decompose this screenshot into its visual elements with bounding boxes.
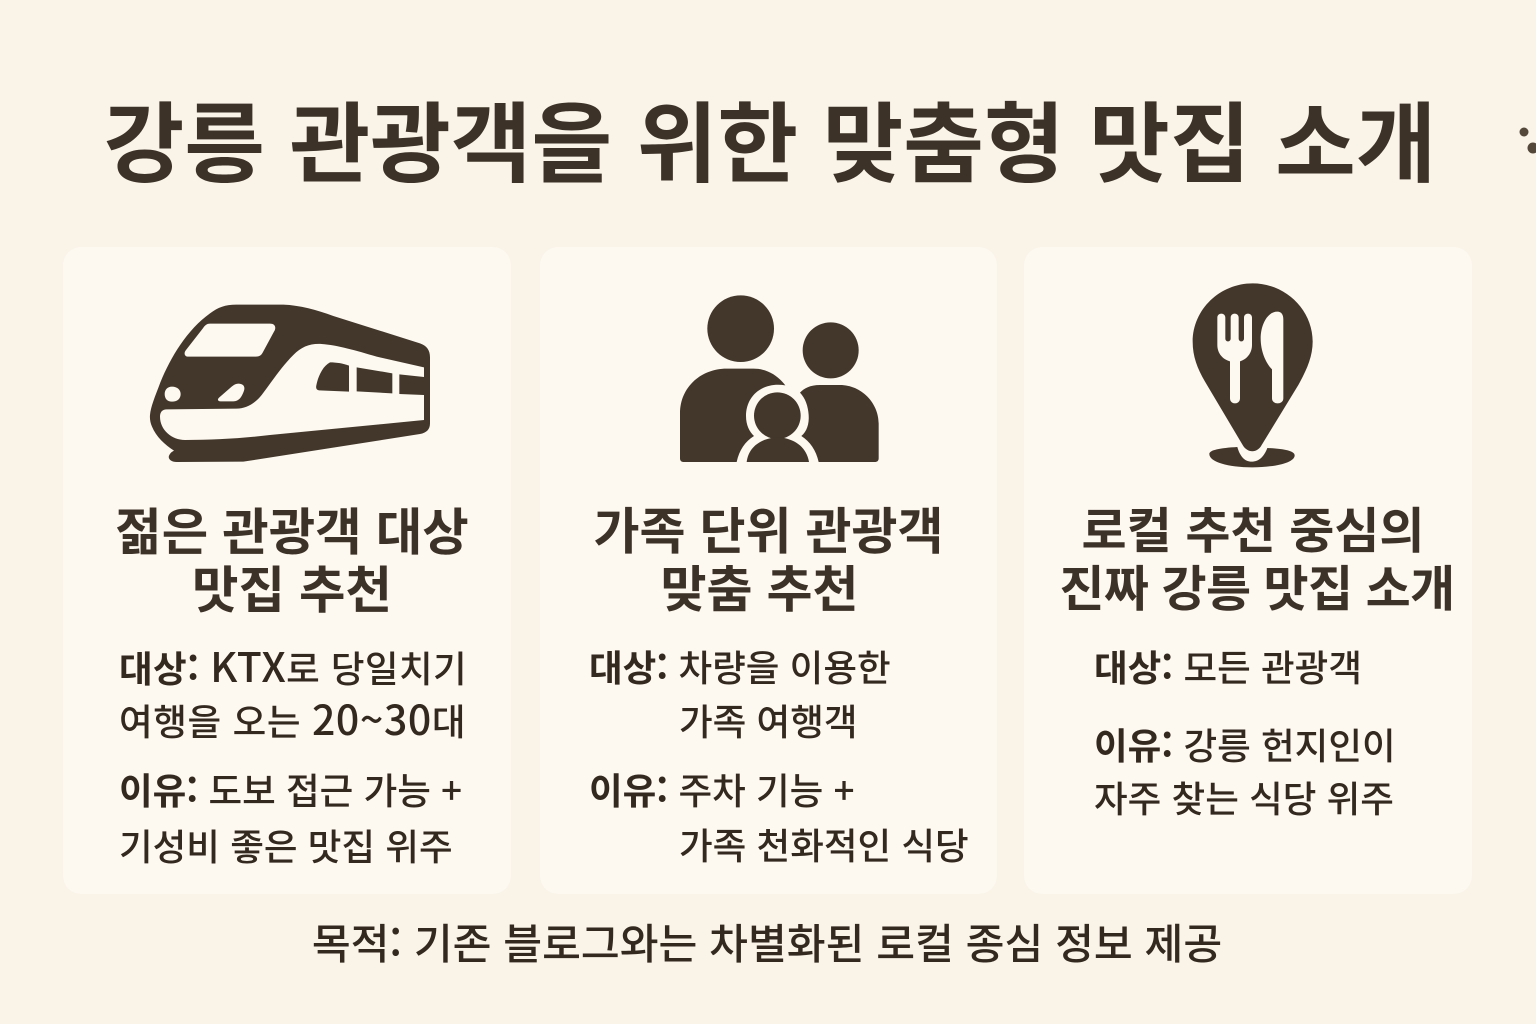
text: target and reason bbox=[119, 634, 467, 871]
heading bbox=[115, 491, 469, 623]
icon: high-speed train bbox=[150, 304, 430, 462]
panel: family tourists bbox=[540, 247, 997, 894]
heading: 로컬 추천 중심의 bbox=[1081, 492, 1424, 563]
target line: 대상: 모든 관광객 bbox=[1094, 639, 1362, 692]
target line 1: 대상: KTX로 당일치기 bbox=[119, 634, 467, 694]
target line 2: 가족 여행객 bbox=[679, 693, 858, 746]
decorative specks at right edge bbox=[1520, 128, 1536, 154]
reason line 2: 자주 찾는 식당 위주 bbox=[1094, 770, 1394, 823]
reason line 2: 기성비 좋은 맛집 위주 bbox=[119, 818, 453, 871]
footer: purpose: 목적: 기존 블로그와는 차별화된 로컬 종심 정보 제공 bbox=[312, 911, 1222, 972]
reason line 1: 이유: 강릉 헌지인이 bbox=[1094, 717, 1396, 770]
heading bbox=[1059, 492, 1455, 621]
text: target and reason bbox=[589, 639, 969, 870]
heading: 맛집 추천 bbox=[192, 549, 392, 623]
title: 강릉 관광객을 위한 맞춤형 맛집 소개 bbox=[104, 74, 1436, 201]
reason line 1: 이유: 주차 기능 + bbox=[589, 762, 854, 815]
reason line 2: 가족 천화적인 식당 bbox=[679, 817, 969, 870]
icon: family bbox=[680, 295, 879, 462]
target line 2: 여행을 오는 20~30대 bbox=[119, 687, 466, 747]
panel: young tourists bbox=[63, 247, 511, 894]
target line 1: 대상: 차량을 이용한 bbox=[589, 639, 891, 692]
heading: 젊은 관광객 대상 bbox=[115, 491, 469, 565]
heading: 가족 단위 관광객 bbox=[594, 492, 944, 564]
heading bbox=[594, 492, 944, 622]
panel: local recommendations bbox=[1024, 247, 1472, 894]
text: target and reason bbox=[1094, 639, 1396, 823]
heading: 진짜 강릉 맛집 소개 bbox=[1059, 550, 1455, 621]
icon: restaurant map pin bbox=[1192, 283, 1313, 468]
heading: 맞춤 추천 bbox=[660, 550, 858, 622]
reason line 1: 이유: 도보 접근 가능 + bbox=[119, 762, 462, 815]
